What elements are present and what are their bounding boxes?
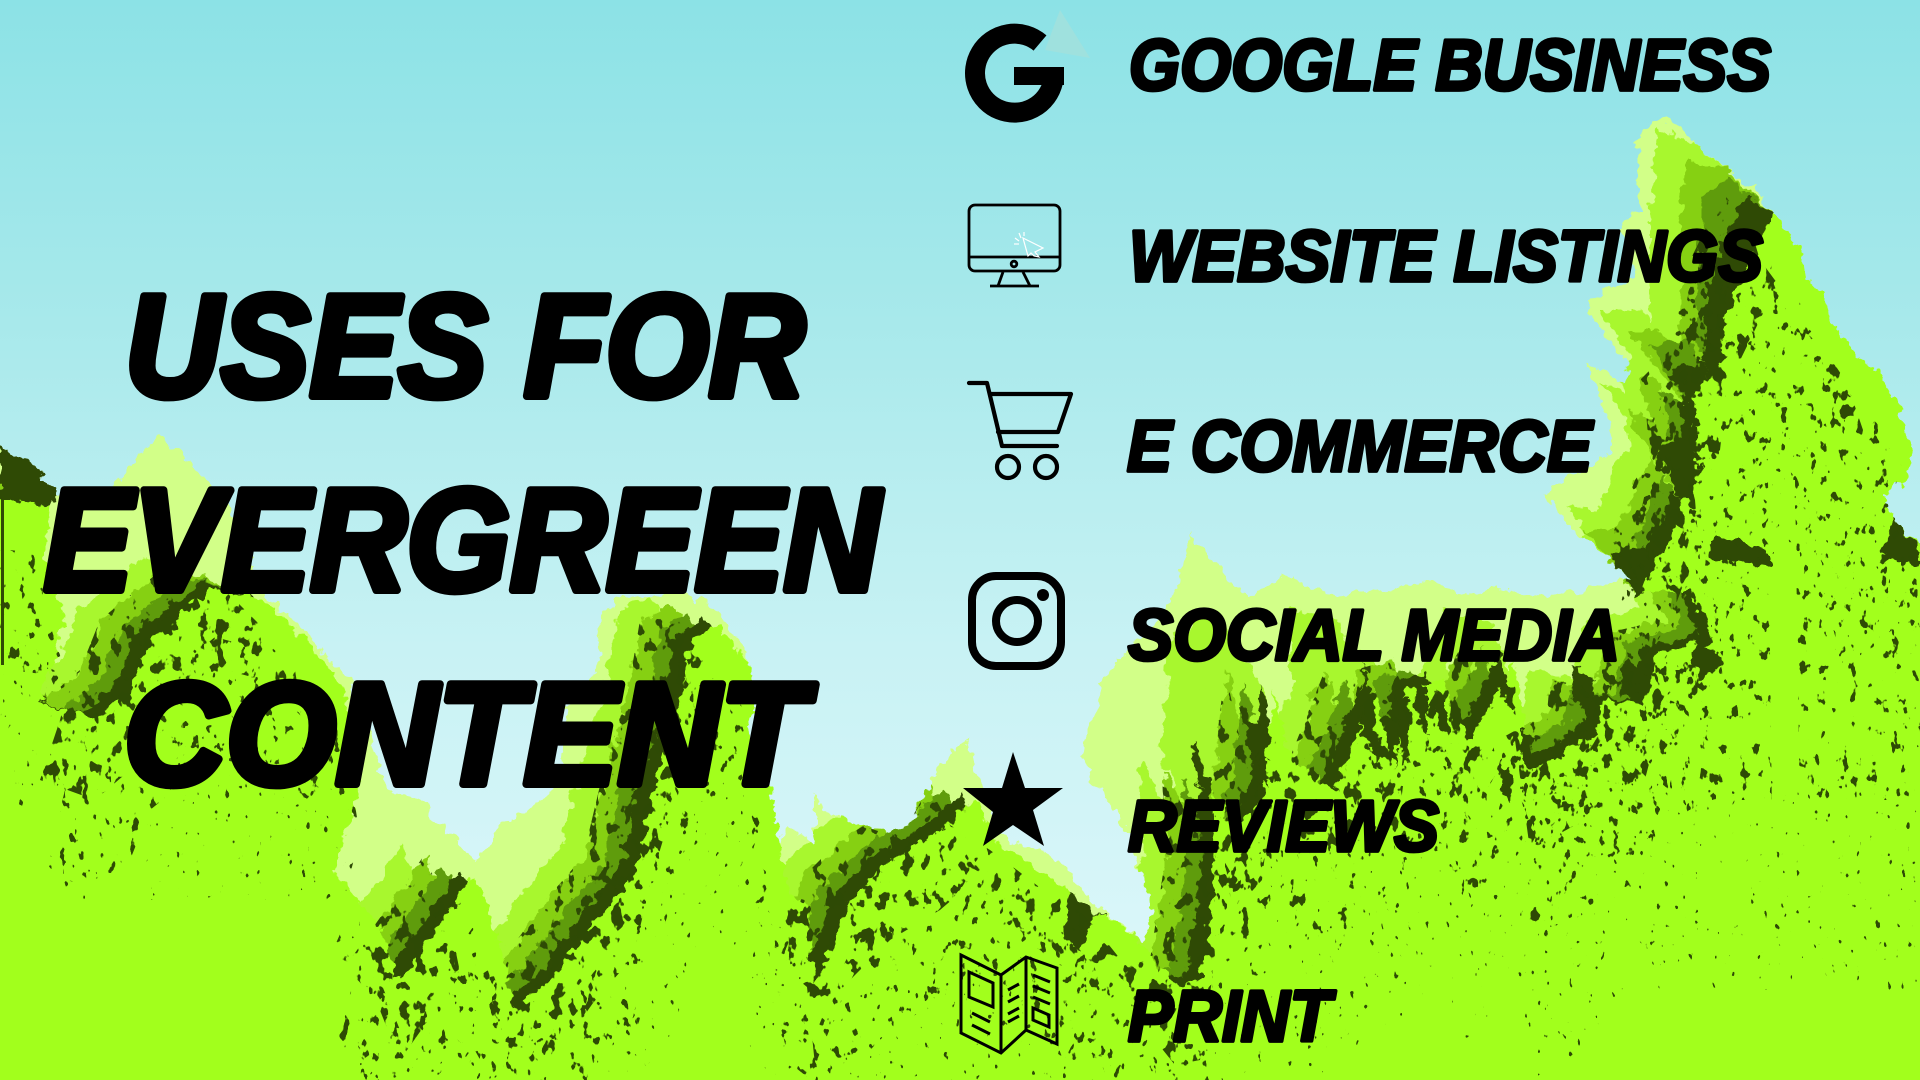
label: google business: GOOGLE BUSINESS (1129, 26, 1771, 106)
icon: star (963, 752, 1063, 846)
icon: shopping cart (969, 383, 1071, 478)
title: uses for evergreen content (44, 265, 883, 815)
label: print: PRINT (1128, 977, 1337, 1057)
label: website listings: WEBSITE LISTINGS (1129, 217, 1763, 297)
title: uses for evergreen content: CONTENT (124, 653, 816, 815)
label: reviews: REVIEWS (1128, 787, 1439, 867)
title: uses for evergreen content: USES FOR (125, 265, 805, 427)
title: uses for evergreen content: EVERGREEN (44, 459, 883, 621)
icon: instagram (972, 576, 1061, 666)
icon: folded print brochure (961, 955, 1057, 1053)
icon: desktop monitor with cursor (969, 205, 1060, 286)
label: e commerce: E COMMERCE (1127, 407, 1594, 487)
label: social media: SOCIAL MEDIA (1128, 596, 1620, 676)
icon: google G (975, 10, 1090, 113)
